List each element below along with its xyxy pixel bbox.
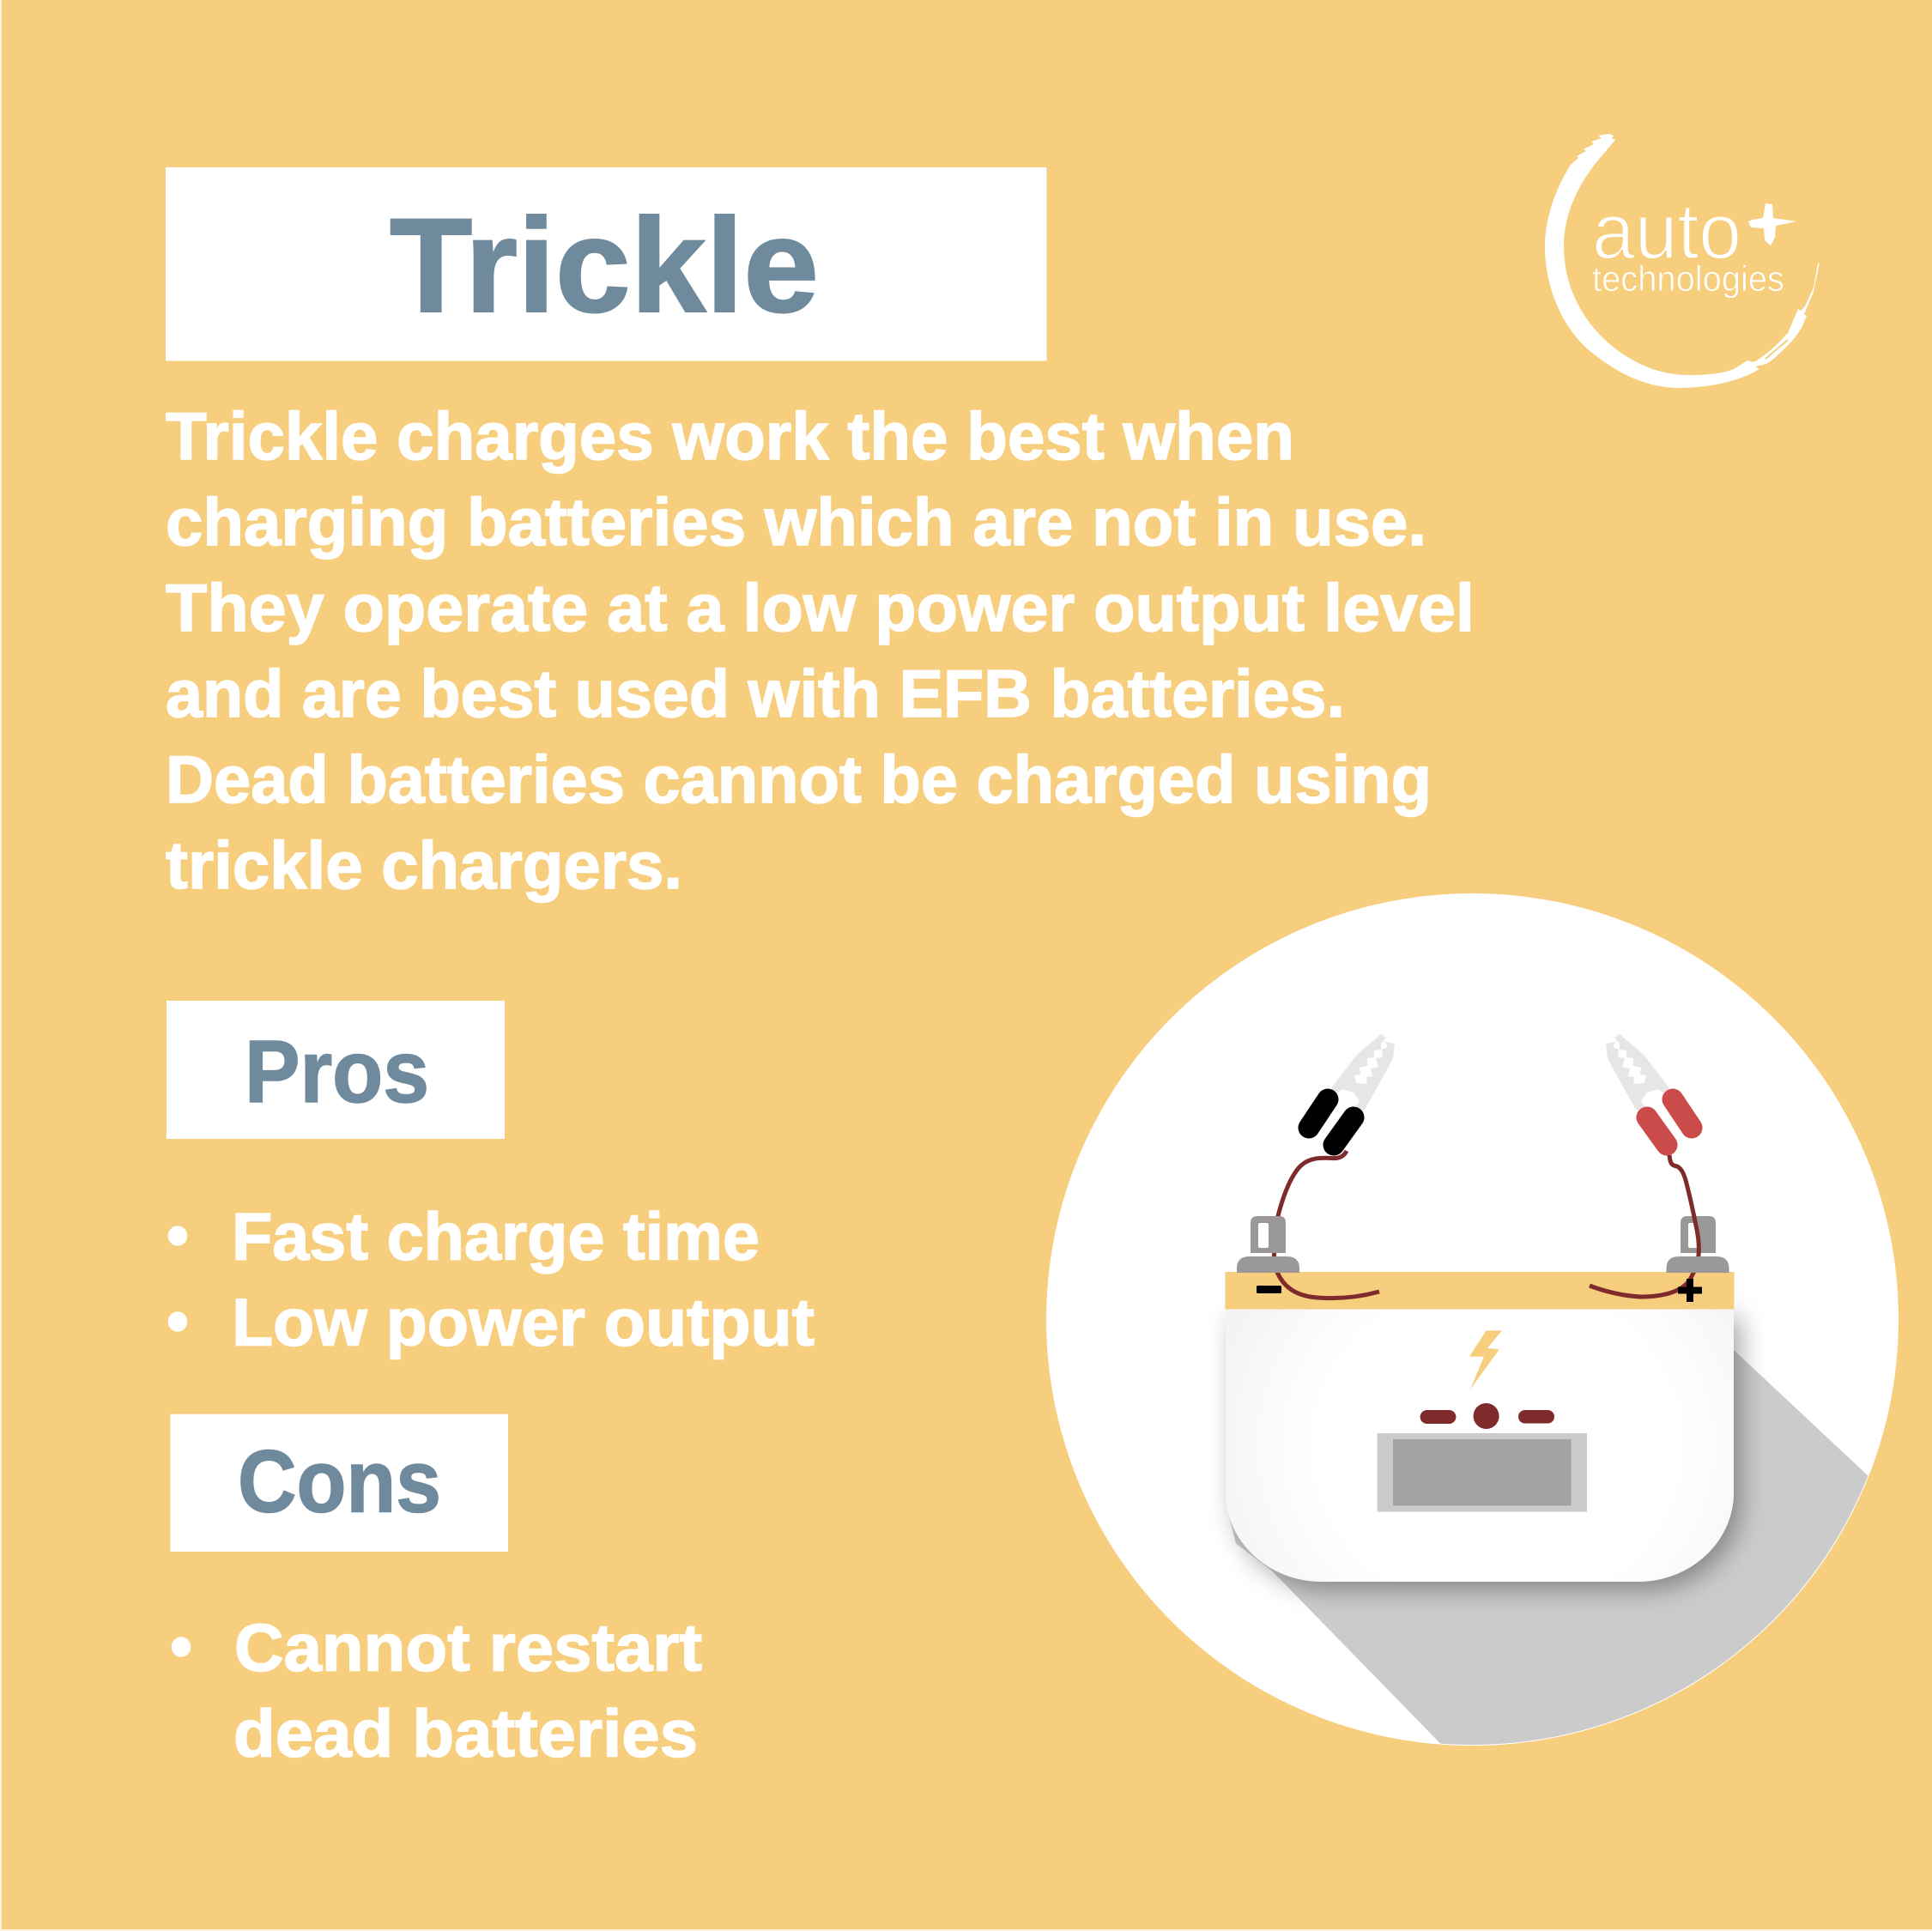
pros list: Fast charge time	[232, 1199, 760, 1274]
positive terminal base	[1667, 1256, 1729, 1273]
negative terminal base	[1237, 1256, 1299, 1273]
bullet	[168, 1312, 187, 1331]
logo word technologies: technologies	[1592, 258, 1784, 299]
logo brush ring	[1545, 134, 1820, 388]
description paragraph: They operate at a low power output level	[166, 570, 1475, 645]
minus sign	[1257, 1286, 1281, 1293]
description paragraph: trickle chargers.	[166, 827, 682, 903]
cons list	[172, 1610, 702, 1771]
description paragraph: charging batteries which are not in use.	[166, 484, 1426, 560]
red clamp	[1606, 1034, 1692, 1145]
battery illustration circle	[1046, 893, 1932, 1765]
description paragraph: and are best used with EFB batteries.	[166, 656, 1345, 731]
pros list: Low power output	[232, 1285, 815, 1360]
plus sign	[1678, 1279, 1702, 1302]
positive terminal post	[1681, 1216, 1716, 1253]
negative wire	[1274, 1151, 1379, 1298]
logo word auto: auto	[1592, 188, 1741, 275]
battery display	[1378, 1433, 1587, 1512]
cons list: Cannot restart	[234, 1610, 702, 1686]
black clamp	[1309, 1034, 1395, 1145]
negative terminal post	[1251, 1216, 1286, 1253]
description paragraph: Trickle charges work the best when	[166, 398, 1294, 474]
bullet	[168, 1226, 187, 1245]
battery top band	[1226, 1272, 1734, 1310]
bullet	[172, 1637, 191, 1656]
cons heading	[170, 1414, 508, 1552]
description paragraph: Dead batteries cannot be charged using	[166, 742, 1432, 817]
cons list: dead batteries	[233, 1696, 698, 1771]
logo brush split	[1765, 340, 1788, 359]
pros heading	[167, 1001, 505, 1139]
indicator lights	[1420, 1403, 1554, 1429]
cons heading: Cons	[238, 1432, 441, 1531]
title box	[166, 167, 1047, 360]
positive wire	[1590, 1155, 1699, 1297]
lightning bolt icon	[1469, 1330, 1502, 1389]
long shadow	[1229, 1350, 1868, 1745]
pros list	[168, 1199, 815, 1360]
battery body	[1226, 1309, 1734, 1582]
description paragraph	[166, 398, 1475, 903]
logo: auto+ technologies	[1545, 134, 1820, 388]
pros heading: Pros	[245, 1022, 429, 1121]
title text: Trickle	[390, 191, 819, 341]
logo plus	[1748, 203, 1796, 245]
